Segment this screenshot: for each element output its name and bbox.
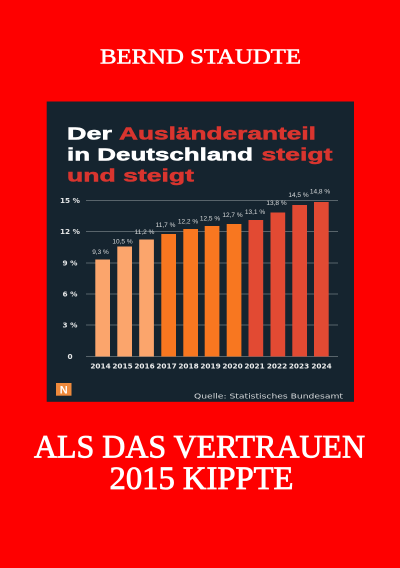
bar value labels: 10,5 % <box>112 239 133 246</box>
bar value labels: 11,2 % <box>135 229 155 236</box>
icon: N logo <box>56 383 72 396</box>
bar value labels: 12,5 % <box>200 216 220 223</box>
chart heading: und steigt <box>67 165 194 185</box>
bar value labels: 14,8 % <box>310 189 330 196</box>
x axis year labels: 2023 <box>289 362 309 370</box>
bar value labels: 13,8 % <box>266 200 287 207</box>
bar value labels: 12,2 % <box>178 218 198 226</box>
y axis labels: 12 % <box>60 227 81 236</box>
y axis labels: 9 % <box>63 259 78 268</box>
x axis year labels: 2015 <box>112 362 133 370</box>
x axis year labels: 2017 <box>156 362 177 370</box>
main title <box>34 430 365 497</box>
chart heading <box>67 123 333 185</box>
author name: BERND STAUDTE <box>100 44 301 68</box>
y axis labels: 6 % <box>63 290 78 299</box>
bar value labels: 13,1 % <box>245 209 265 216</box>
y axis labels <box>60 196 81 361</box>
y axis labels: 0 <box>67 352 73 361</box>
bar value labels: 9,3 % <box>92 249 109 256</box>
bar value labels: 11,7 % <box>156 222 176 229</box>
main title: 2015 KIPPTE <box>110 461 294 497</box>
x axis year labels: 2022 <box>267 362 287 370</box>
chart heading: steigt <box>262 144 333 164</box>
x axis year labels: 2021 <box>244 362 265 370</box>
bar value labels: 14,5 % <box>288 192 309 199</box>
source note: Quelle: Statistisches Bundesamt <box>194 392 343 401</box>
x axis year labels: 2019 <box>200 362 221 370</box>
bar chart <box>95 202 329 356</box>
main title: ALS DAS VERTRAUEN <box>34 430 365 466</box>
grid lines <box>86 200 338 356</box>
bar value labels <box>92 189 330 256</box>
y axis labels: 15 % <box>60 196 81 205</box>
x axis year labels: 2020 <box>222 362 243 370</box>
panel: chart poster <box>47 102 354 402</box>
x axis year labels <box>90 362 332 370</box>
chart heading: in Deutschland <box>67 144 253 164</box>
y axis labels: 3 % <box>63 321 78 330</box>
x axis year labels: 2016 <box>134 362 155 370</box>
x axis year labels: 2014 <box>90 362 111 370</box>
bar value labels: 12,7 % <box>222 212 243 219</box>
chart heading: Der <box>67 123 112 143</box>
chart heading: Ausländeranteil <box>119 123 316 143</box>
x axis year labels: 2018 <box>178 362 199 370</box>
icon: N logo: N <box>60 384 68 396</box>
x axis year labels: 2024 <box>311 362 332 370</box>
